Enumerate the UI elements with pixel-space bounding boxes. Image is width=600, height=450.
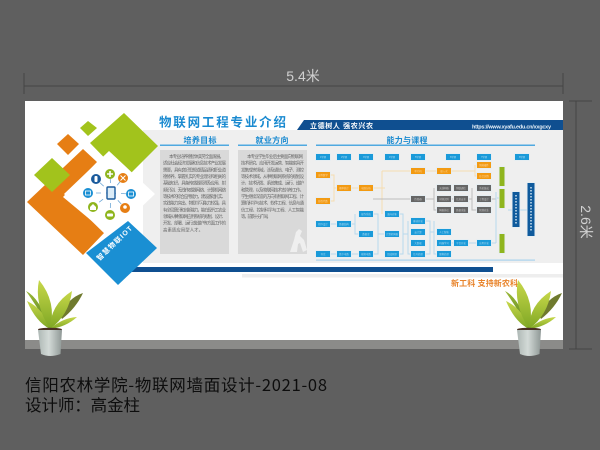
panel: 能力与课程 <box>316 135 535 261</box>
title: 物联网工程专业介绍 <box>159 114 286 130</box>
width dimension: 5.4米: 5.4米 <box>286 68 320 84</box>
chart blue nodes: 面向对象 <box>387 212 397 216</box>
height dimension: 2.6米 <box>569 101 594 349</box>
chart orange nodes: 综合实践 <box>479 174 489 178</box>
orange L-shape <box>27 149 105 255</box>
text block: 培养目标: 有全局意识和创新能力，能在现代工农业 <box>163 206 227 213</box>
chart blue nodes: 数据库 <box>362 232 370 236</box>
chart blue nodes: 操作系统 <box>361 212 371 216</box>
caption: 信阳农林学院-物联网墙面设计-2021-08 <box>25 372 327 396</box>
text block: 就业方向: 等技术领域，从事物联网系统的规划设 <box>241 173 305 180</box>
panel: 培养目标 <box>160 135 229 254</box>
chart blue nodes: 数据结构 <box>339 222 349 226</box>
caption <box>25 372 327 416</box>
header ribbon <box>297 120 563 130</box>
chart blue nodes: 大数据 <box>414 241 422 245</box>
text block: 就业方向: 信工程、控制科学与工程、人工智能 <box>241 206 305 213</box>
text block: 就业方向: 计、技术研发、系统集成、运行、维护 <box>241 180 305 187</box>
chart grey nodes: 信息安全 <box>456 197 466 201</box>
bottom light band <box>242 274 563 278</box>
medium green diamond <box>34 158 70 192</box>
width dimension: 5.4米 <box>24 68 563 94</box>
bottom dark blue bar <box>130 267 493 272</box>
text block: 就业方向: 算机科学与技术、软件工程、信息与通 <box>241 200 305 207</box>
chart blue nodes: 程序设计 <box>318 222 328 226</box>
small orange diamond <box>57 134 79 155</box>
height dimension: 2.6米: 2.6米 <box>578 205 594 239</box>
text block: 培养目标: 本专业培养德智体美劳全面发展， <box>169 153 224 160</box>
text block: 就业方向: 学生继续深造的方向有物联网工程、计 <box>241 193 305 200</box>
text block: 就业方向: 发集成等领域，涉及通信、电子、测控 <box>241 166 305 173</box>
chart orange nodes: 线性代数 <box>318 199 328 203</box>
slogan: 新工科 支持新农科 <box>451 278 518 288</box>
chart stage chips: 1学期 <box>320 155 327 159</box>
chart blue nodes: 导论 <box>321 252 326 256</box>
large green diamond <box>90 113 158 179</box>
text block: 就业方向: 等，前景十分广阔。 <box>241 213 271 220</box>
plant: right <box>505 280 562 356</box>
chart blue nodes: 数字电路 <box>339 252 349 256</box>
chart blue nodes: 应用开发 <box>479 241 489 245</box>
chart stage chips: 8学期 <box>519 155 526 159</box>
text block: 培养目标: 德修养，掌握扎实的专业理论和相关的 <box>163 173 227 180</box>
text block: 就业方向: 技术研究、应用开发运营、智能家具开 <box>241 160 305 167</box>
chart grey nodes: 智慧农业 <box>479 208 489 212</box>
chart grey nodes: 数据采集 <box>456 208 466 212</box>
chart blue nodes <box>316 211 491 257</box>
plant: left <box>26 280 83 356</box>
text block: 就业方向: 本专业学生毕业后主要面向物联网 <box>247 153 304 160</box>
chart grey nodes: 无线网络 <box>439 186 449 190</box>
blue label diamond <box>86 221 157 285</box>
chart blue nodes: 组成原理 <box>387 252 397 256</box>
text block: 就业方向 <box>241 153 305 220</box>
chart stage chips: 2学期 <box>341 155 348 159</box>
chart stage chips <box>316 154 529 160</box>
text block: 培养目标: 基础知识，具备传感器原理及应用、射 <box>163 180 227 187</box>
chart blue nodes: 机器学习 <box>439 241 449 245</box>
chart blue nodes: 云计算 <box>414 230 422 234</box>
chart orange nodes: 高等数学 <box>318 173 328 177</box>
chart grey nodes: 系统集成 <box>479 186 489 190</box>
chart grey nodes <box>411 185 491 213</box>
icon: graduate silhouette <box>290 229 307 252</box>
chart orange nodes: 概率统计 <box>339 186 349 190</box>
header ribbon: https://www.xyafu.edu.cn/xxgcxy <box>472 124 552 130</box>
floor band <box>25 340 563 349</box>
heading: 就业方向: 就业方向 <box>256 135 288 145</box>
chart dark blue outcome bars <box>512 183 534 236</box>
small green diamond <box>80 121 97 136</box>
content panel background <box>143 130 563 263</box>
blue label diamond: 智慧物联IOT <box>95 223 134 262</box>
chart stage chips: 3学期 <box>363 155 370 159</box>
heading: 能力与课程: 能力与课程 <box>386 135 428 145</box>
white diamond <box>64 151 155 238</box>
text block: 培养目标: 频识别、无线传感器网络、计算机网络 <box>163 186 227 193</box>
text block: 培养目标: 领域从事物联网应用系统的规划、设计、 <box>163 213 226 220</box>
diamond graphic <box>27 113 158 285</box>
chart blue nodes: 图像处理 <box>439 252 449 256</box>
chart orange nodes <box>316 162 491 204</box>
chart stage chips: 5学期 <box>415 155 422 159</box>
text block: 培养目标: 等技术的综合应用能力，建设基础扎实、 <box>163 193 226 200</box>
chart orange nodes: 单片机 <box>414 169 422 173</box>
chart grey nodes: 射频识别 <box>439 197 449 201</box>
chart grey nodes: 工程设计 <box>479 197 489 201</box>
text block: 就业方向: 和管理，以及物联网技术支持等工作。 <box>241 186 304 193</box>
chart orange nodes: 电路分析 <box>361 186 371 190</box>
text block: 培养目标: 需要，具有良好思想道德品质和职业道 <box>163 166 227 173</box>
chart grey nodes: 网络协议 <box>439 208 449 212</box>
text block: 培养目标: 适应社会经济发展和信息技术产业发展 <box>163 160 227 167</box>
text block: 培养目标: 开发、部署、运行或维护等方面工作的 <box>163 220 227 227</box>
text block: 培养目标: 高素质应用型人才。 <box>163 226 203 233</box>
wall <box>25 101 563 340</box>
heading: 培养目标: 培养目标 <box>184 135 216 145</box>
chart blue nodes: 模拟电路 <box>361 252 371 256</box>
chart blue nodes: 计算机网络 <box>386 232 399 236</box>
flowchart connectors <box>330 165 527 254</box>
chart grey nodes: 物联通信 <box>456 186 466 190</box>
chart blue nodes: 信号处理 <box>413 252 423 256</box>
chart green competency bars <box>500 167 504 253</box>
panel: 就业方向 <box>238 135 307 254</box>
caption: 设计师：高金柱 <box>25 392 140 416</box>
text block: 培养目标 <box>163 153 227 233</box>
icon: IoT hub <box>83 169 136 220</box>
chart stage chips: 6学期 <box>450 155 457 159</box>
chart stage chips: 4学期 <box>389 155 396 159</box>
chart grey nodes: 传感器 <box>414 197 422 201</box>
chart orange nodes: 嵌入式 <box>440 169 448 173</box>
chart blue nodes: 人工智能 <box>439 230 449 234</box>
header ribbon: 立德树人 强农兴农 <box>310 121 373 130</box>
chart blue nodes: 移动开发 <box>413 219 423 223</box>
text block: 培养目标: 实践能力突出、物联学习能力较强，具 <box>163 200 227 207</box>
chart stage chips: 7学期 <box>481 155 488 159</box>
chart orange nodes: 智能硬件 <box>479 163 489 167</box>
chart blue nodes: 平台开发 <box>456 241 466 245</box>
